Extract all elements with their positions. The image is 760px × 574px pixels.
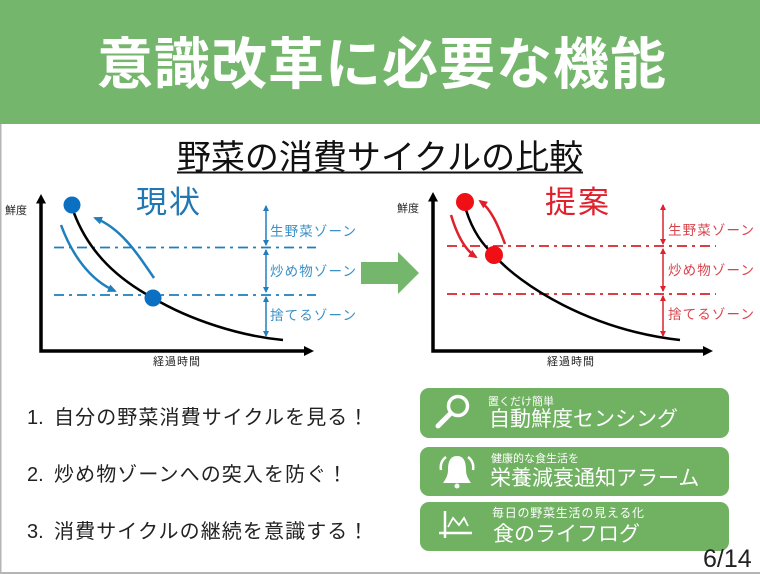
feature name: 自動鮮度センシング bbox=[489, 408, 678, 431]
action 2: 2. bbox=[27, 464, 44, 486]
zone labels: 捨てるゾーン bbox=[270, 308, 356, 323]
freshness curve bbox=[466, 210, 680, 340]
zone labels: 生野菜ゾーン bbox=[270, 224, 356, 239]
zone boundary lines bbox=[54, 248, 316, 295]
caption: 置くだけ簡単 bbox=[488, 394, 554, 408]
icon: bell bbox=[441, 456, 473, 488]
chart: current state bbox=[5, 185, 356, 368]
zone labels: 炒め物ゾーン bbox=[270, 264, 356, 279]
icon: magnifying glass bbox=[438, 396, 468, 426]
position dots bbox=[456, 193, 503, 264]
position dots bbox=[64, 196, 162, 306]
caption: 健康的な食生活を bbox=[491, 451, 579, 465]
action 3: 3. bbox=[27, 521, 44, 543]
subtitle: 野菜の消費サイクルの比較 bbox=[177, 139, 583, 177]
zone labels: 炒め物ゾーン bbox=[668, 263, 754, 278]
feature name: 栄養減衰通知アラーム bbox=[490, 467, 699, 490]
cycle arrows bbox=[61, 218, 154, 291]
zone labels: 生野菜ゾーン bbox=[668, 223, 754, 238]
header band with title bbox=[0, 0, 760, 124]
chart heading: proposal: 提案 bbox=[545, 185, 611, 220]
feature: food life log bbox=[420, 502, 729, 551]
x axis label: 経過時間 bbox=[153, 355, 201, 368]
feature name: 食のライフログ bbox=[493, 523, 640, 546]
zone labels bbox=[270, 224, 356, 323]
caption: 毎日の野菜生活の見える化 bbox=[492, 505, 644, 520]
feature: nutrient decline alarm bbox=[420, 447, 729, 496]
y axis label: 鮮度 bbox=[5, 203, 27, 217]
arrow: current to proposal bbox=[361, 252, 419, 294]
chart heading: current state: 現状 bbox=[136, 185, 202, 220]
axes bbox=[36, 194, 314, 356]
zone labels: 捨てるゾーン bbox=[668, 307, 754, 322]
icon: line chart bbox=[439, 511, 472, 538]
x axis label: 経過時間 bbox=[547, 355, 595, 368]
axes bbox=[428, 192, 713, 356]
title: 意識改革に必要な機能 bbox=[97, 33, 667, 96]
chart: proposal bbox=[397, 185, 754, 368]
freshness curve bbox=[74, 213, 283, 340]
action 1: 自分の野菜消費サイクルを見る！ bbox=[54, 406, 370, 429]
zone labels bbox=[668, 223, 754, 322]
action 1: 1. bbox=[27, 407, 44, 429]
zone boundary lines bbox=[447, 246, 716, 294]
action 3: 消費サイクルの継続を意識する！ bbox=[54, 520, 370, 543]
feature: automatic freshness sensing bbox=[420, 388, 729, 438]
y axis label: 鮮度 bbox=[397, 201, 419, 215]
action 2: 炒め物ゾーンへの突入を防ぐ！ bbox=[54, 463, 348, 486]
zone range arrows bbox=[662, 205, 664, 336]
cycle arrows bbox=[451, 201, 505, 257]
zone range arrows bbox=[265, 206, 267, 336]
page number: 6/14 bbox=[703, 545, 752, 573]
action list bbox=[27, 406, 370, 543]
